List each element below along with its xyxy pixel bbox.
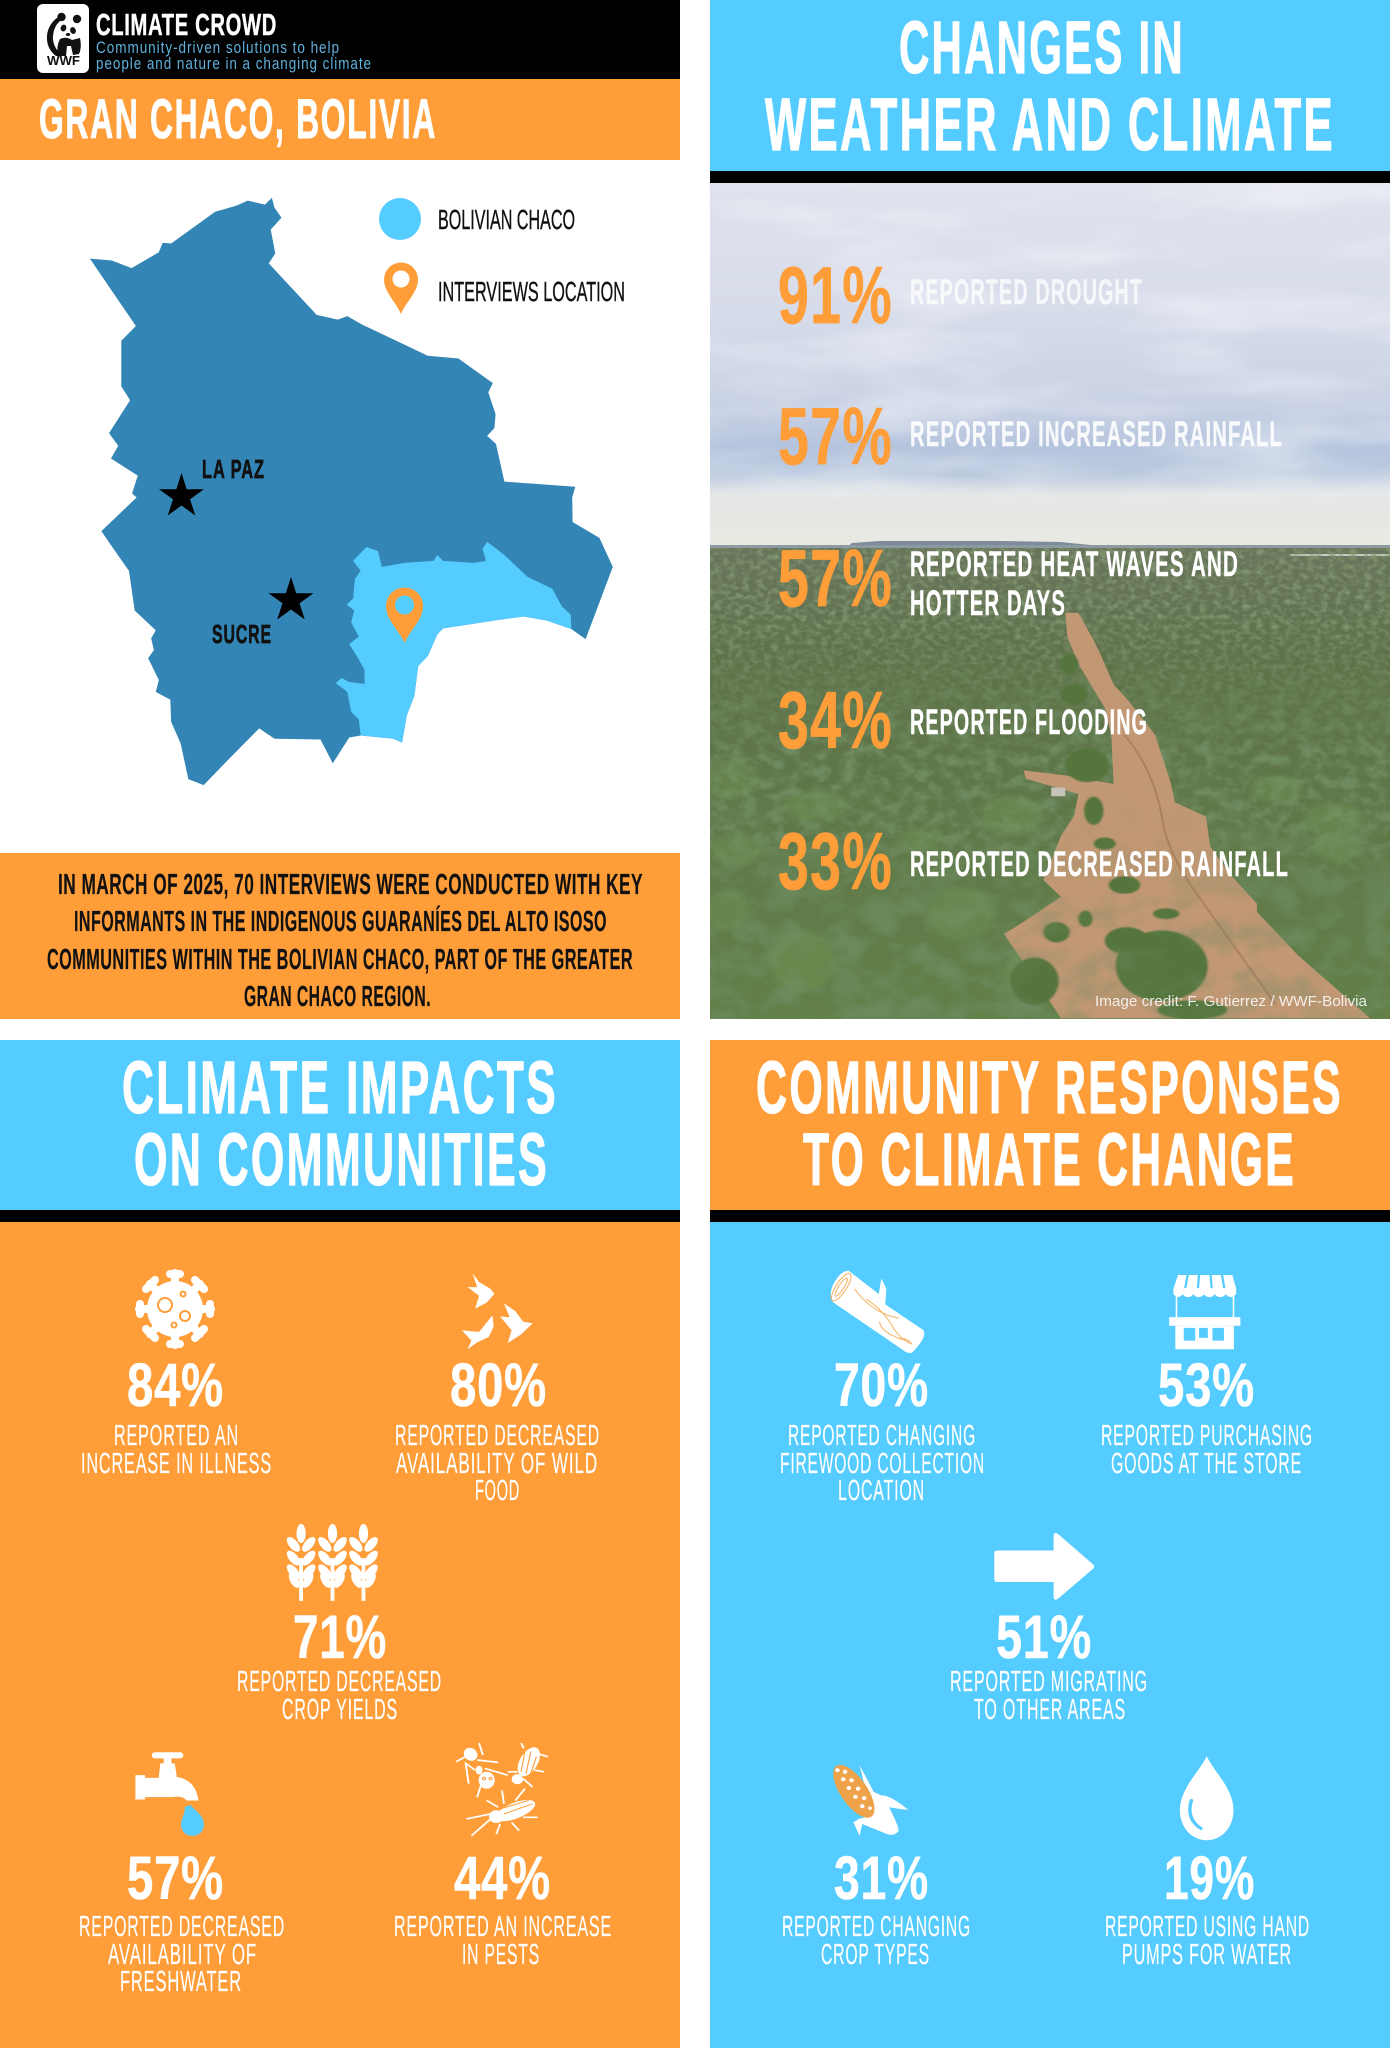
icon: corn: [825, 1760, 908, 1836]
heading: climate impacts on communities: [0, 1040, 680, 1222]
stat: 31% crop types: CROP TYPES: [821, 1939, 930, 1971]
stat: 71% crop yields: REPORTED DECREASED: [237, 1666, 442, 1698]
text block: study description: [0, 853, 680, 1019]
icon: dripping tap: [135, 1752, 204, 1836]
legend: chaco label: BOLIVIAN CHACO: [438, 204, 575, 235]
icon: Sucre star: [268, 577, 314, 620]
legend: location label: INTERVIEWS LOCATION: [438, 276, 625, 307]
icon: virus: [139, 1273, 211, 1345]
icon: La Paz star: [159, 473, 204, 516]
stat: 57% reported heat waves and hotter days: [778, 534, 1239, 624]
stat: 80% wild food: REPORTED DECREASED: [395, 1420, 600, 1452]
map: Bolivian Chaco region: [336, 542, 571, 743]
stat: 53% store: [1101, 1275, 1313, 1480]
stat: 91% reported drought: REPORTED DROUGHT: [910, 273, 1143, 312]
stat: 84% illness: 84%: [127, 1351, 224, 1419]
icon: insects: [456, 1743, 548, 1836]
stat: 84% illness: [81, 1273, 272, 1480]
stat: 31% crop types: 31%: [834, 1844, 929, 1912]
stat: 44% pests: IN PESTS: [462, 1939, 540, 1971]
stat: 80% wild food: FOOD: [475, 1475, 520, 1507]
legend: [379, 198, 625, 314]
stat: 19% hand pumps: [1105, 1756, 1310, 1971]
stat: 57% reported heat waves and hotter days: 57%: [778, 534, 893, 624]
legend: chaco swatch: [379, 198, 421, 240]
panel: map of Bolivia: [90, 198, 613, 785]
brand name: CLIMATE CROWD: [96, 7, 277, 42]
photo: aerial view of forest and dirt road: [706, 183, 1390, 1019]
stat: 70% firewood: 70%: [834, 1351, 929, 1419]
stat: 57% freshwater: REPORTED DECREASED: [79, 1911, 285, 1943]
text block: study description: COMMUNITIES WITHIN THE BOLIVIAN CHACO, PART OF THE GREATER: [47, 944, 633, 976]
brand tagline: [96, 38, 372, 73]
legend: location pin: [384, 262, 418, 314]
panel: aerial photo with weather stats: [706, 183, 1390, 1019]
stat: 84% illness: INCREASE IN ILLNESS: [81, 1448, 272, 1480]
panel: brand header: [0, 0, 680, 79]
stat: 70% firewood: FIREWOOD COLLECTION: [780, 1448, 985, 1480]
stat: 34% reported flooding: [778, 676, 1148, 766]
icon: WWF panda logo: [37, 4, 89, 73]
heading: Gran Chaco, Bolivia: [0, 79, 680, 160]
stat: 80% wild food: [395, 1273, 600, 1507]
text block: study description: INFORMANTS IN THE INDIGENOUS GUARANÍES DEL ALTO ISOSO: [74, 904, 607, 938]
stat: 57% freshwater: FRESHWATER: [120, 1966, 242, 1998]
stat: 84% illness: REPORTED AN: [114, 1420, 239, 1452]
stat: 57% reported increased rainfall: [778, 392, 1283, 482]
heading: Gran Chaco, Bolivia: GRAN CHACO, BOLIVIA: [39, 87, 437, 150]
stat: 70% firewood: REPORTED CHANGING: [788, 1420, 976, 1452]
icon: market stall: [1169, 1275, 1240, 1349]
stat: 71% crop yields: CROP YIELDS: [282, 1694, 398, 1726]
stat: 33% reported decreased rainfall: [778, 817, 1289, 907]
panel: community responses: [710, 1222, 1390, 2048]
label: La Paz: LA PAZ: [202, 454, 265, 484]
text block: study description: GRAN CHACO REGION.: [244, 981, 431, 1013]
stat: 51% migrating: REPORTED MIGRATING: [950, 1666, 1148, 1698]
stat: 57% freshwater: [79, 1752, 285, 1998]
stat: 34% reported flooding: REPORTED FLOODING: [910, 703, 1148, 742]
stat: 34% reported flooding: 34%: [778, 676, 893, 766]
icon: WWF panda logo: WWF: [47, 53, 80, 68]
stat: 53% store: 53%: [1158, 1351, 1255, 1419]
heading: changes in weather and climate: [710, 0, 1390, 183]
stat: 70% firewood: [780, 1271, 985, 1507]
stat: 80% wild food: AVAILABILITY OF WILD: [396, 1448, 598, 1480]
icon: wheat: [284, 1524, 380, 1601]
stat: 71% crop yields: 71%: [293, 1603, 387, 1671]
stat: 57% freshwater: 57%: [127, 1844, 224, 1912]
stat: 91% reported drought: [778, 251, 1143, 341]
stat: 51% migrating: [950, 1533, 1148, 1726]
stat: 31% crop types: REPORTED CHANGING: [782, 1911, 971, 1943]
stat: 80% wild food: 80%: [450, 1351, 547, 1419]
heading: climate impacts on communities: ON COMMUNITIES: [134, 1118, 549, 1201]
image credit: Image credit: F. Gutierrez / WWF-Bolivia: [1095, 993, 1368, 1010]
stat: 33% reported decreased rainfall: 33%: [778, 817, 893, 907]
icon: water drop: [1180, 1756, 1233, 1840]
heading: changes in weather and climate: CHANGES IN: [899, 6, 1185, 89]
stat: 57% reported heat waves and hotter days: HOTTER DAYS: [910, 584, 1066, 623]
icon: log: [828, 1271, 924, 1353]
stat: 19% hand pumps: 19%: [1164, 1844, 1255, 1912]
stat: 91% reported drought: 91%: [778, 251, 893, 341]
text block: study description: IN MARCH OF 2025, 70 INTERVIEWS WERE CONDUCTED WITH KEY: [58, 869, 643, 901]
stat: 44% pests: 44%: [454, 1844, 551, 1912]
icon: birds: [462, 1273, 533, 1349]
label: Sucre: SUCRE: [212, 619, 272, 649]
brand tagline: Community-driven solutions to help: [96, 38, 340, 57]
stat: 71% crop yields: [237, 1524, 442, 1726]
heading: community responses to climate change: [710, 1040, 1390, 1222]
stat: 44% pests: [394, 1743, 612, 1971]
stat: 44% pests: REPORTED AN INCREASE: [394, 1911, 612, 1943]
panel: climate impacts: [0, 1222, 680, 2048]
stat: 70% firewood: LOCATION: [838, 1475, 925, 1507]
stat: 57% reported increased rainfall: 57%: [778, 392, 893, 482]
heading: climate impacts on communities: CLIMATE IMPACTS: [122, 1046, 558, 1129]
icon: interview location pin: [386, 588, 423, 643]
brand tagline: people and nature in a changing climate: [96, 54, 372, 73]
icon: arrow: [994, 1533, 1094, 1600]
stat: 51% migrating: TO OTHER AREAS: [974, 1694, 1126, 1726]
stat: 31% crop types: [782, 1760, 971, 1971]
stat: 57% freshwater: AVAILABILITY OF: [108, 1939, 257, 1971]
map: Bolivia outline: [90, 198, 613, 785]
stat: 51% migrating: 51%: [996, 1603, 1092, 1671]
